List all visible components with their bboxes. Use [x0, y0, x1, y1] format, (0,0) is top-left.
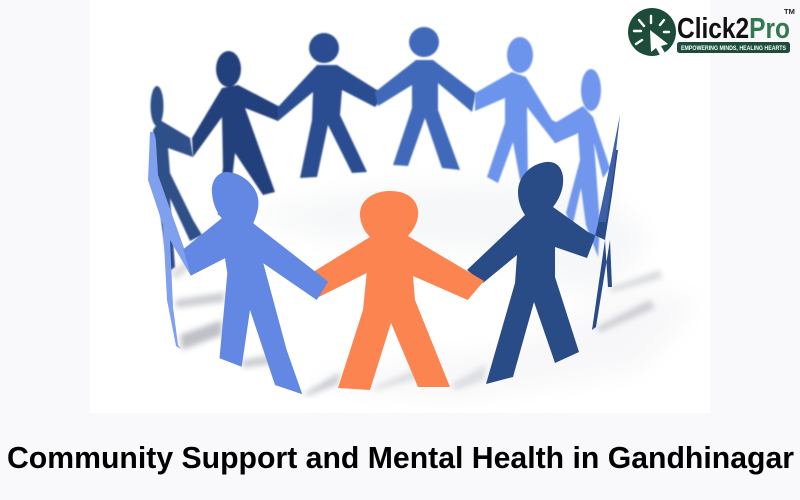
floor shading [250, 184, 700, 400]
logo [628, 7, 795, 56]
person 2 navy [192, 51, 282, 215]
person 6 [555, 69, 610, 257]
orange person [313, 191, 484, 390]
person 3 [278, 33, 385, 178]
front blue person [183, 172, 328, 394]
far-left person [150, 86, 202, 272]
logo tagline pill: EMPOWERING MINDS, HEALING HEARTS [681, 46, 786, 52]
logo tagline pill [677, 42, 790, 53]
cast shadows [170, 258, 662, 396]
thin paper sliver right [598, 115, 620, 222]
photo: paper people circle [90, 0, 710, 413]
trademark: TM [784, 7, 795, 16]
logo badge [628, 8, 676, 56]
person 5 [475, 37, 577, 183]
title: Community Support and Mental Health in Gandhinagar [7, 440, 794, 475]
navy front person [467, 150, 618, 384]
person 4 [375, 27, 476, 170]
logo wordmark: Click2Pro [677, 13, 790, 45]
front-left paper edge [148, 132, 191, 349]
